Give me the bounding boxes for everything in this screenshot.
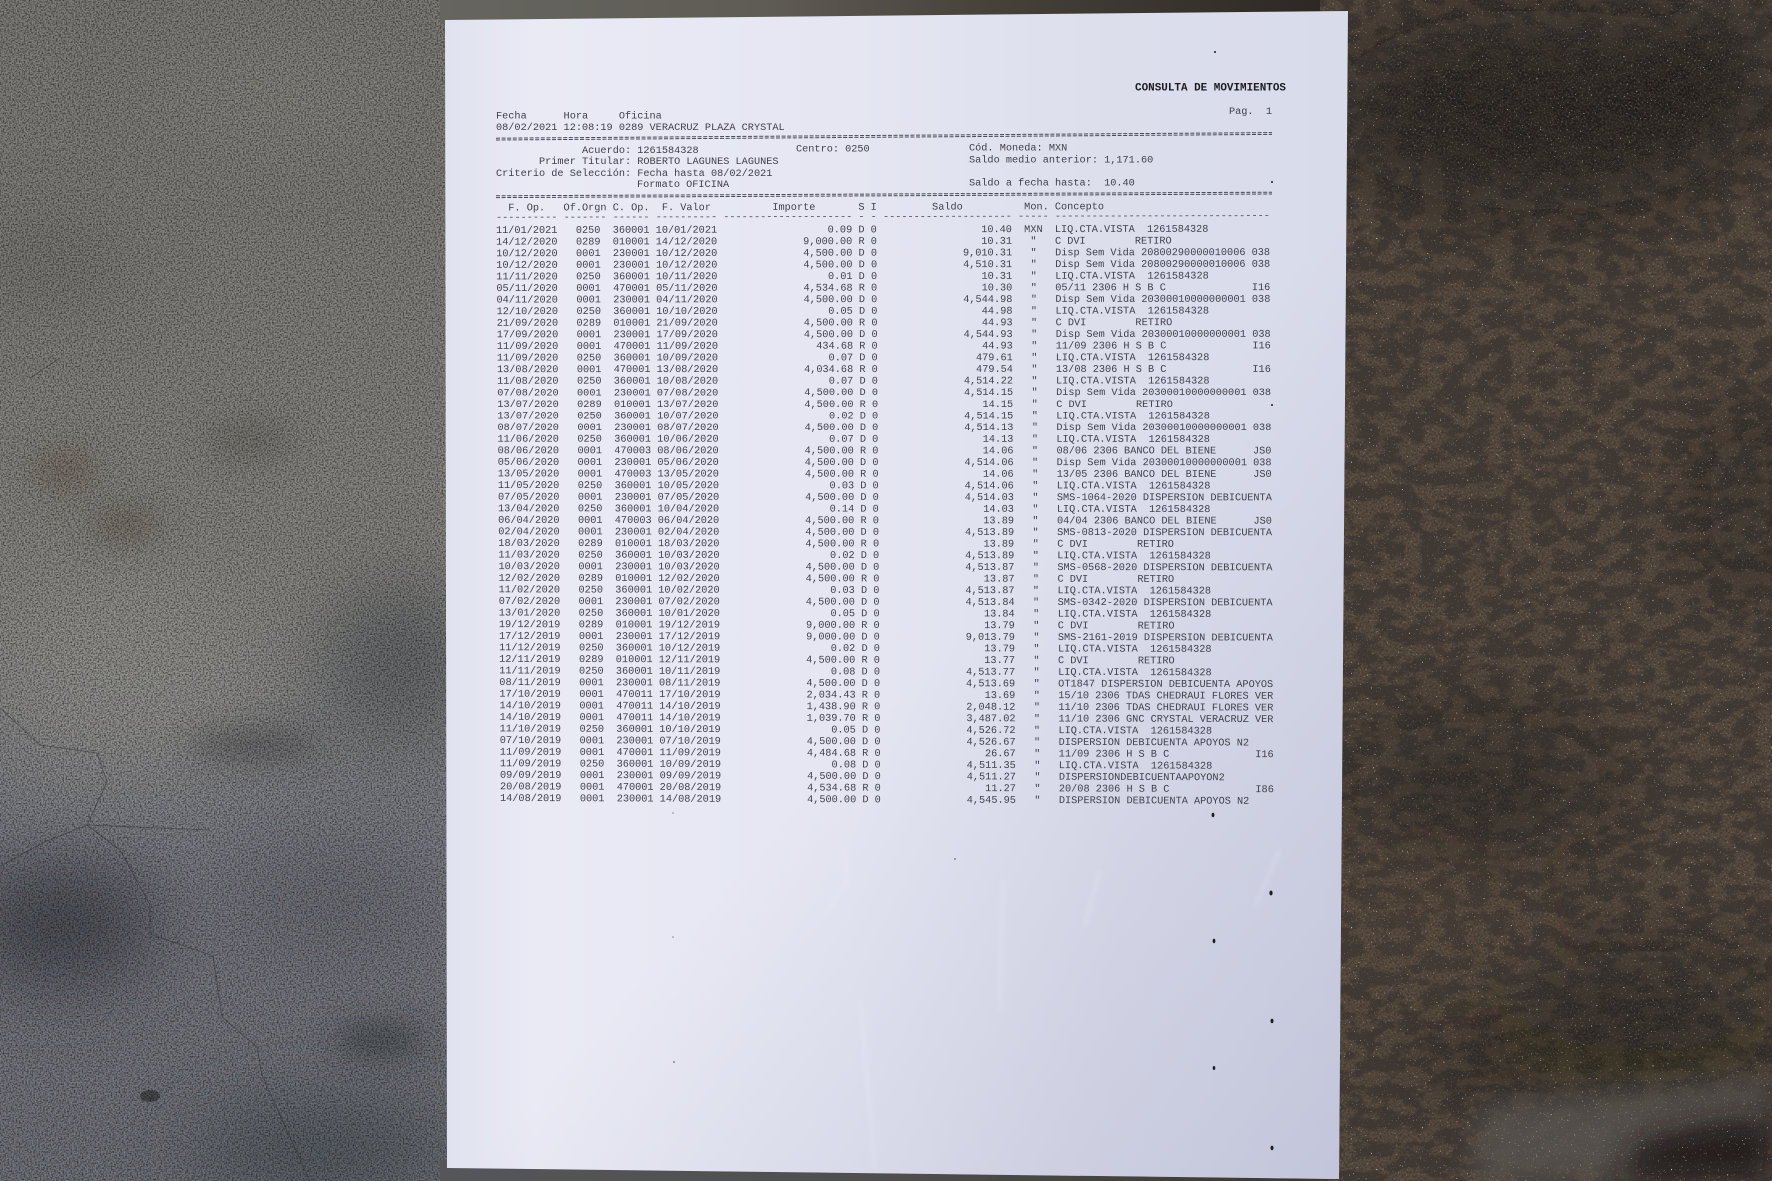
account details — [496, 142, 1153, 191]
column headers: ---------- ------- ------ ---------- --------------------- - - --------------------- ----- ----------------------------------- — [496, 210, 1270, 224]
transactions table: 14/08/2019 0001 230001 14/08/2019 4,500.00 D 0 4,545.95 " DISPERSION DEBICUENTA APOYOS N2 — [500, 793, 1249, 808]
transactions table: 07/08/2020 0001 230001 07/08/2020 4,500.00 D 0 4,514.15 " Disp Sem Vida 20300010000000001 038 — [497, 387, 1271, 399]
page number: Pag. 1 — [1229, 106, 1272, 118]
transactions table: 11/02/2020 0250 360001 10/02/2020 0.03 D 0 4,513.87 " LIQ.CTA.VISTA 1261584328 — [499, 584, 1211, 598]
upper rule — [496, 133, 1272, 140]
transactions table: 11/05/2020 0250 360001 10/05/2020 0.03 D 0 4,514.06 " LIQ.CTA.VISTA 1261584328 — [498, 480, 1210, 492]
account details: Primer Titular: ROBERTO LAGUNES LAGUNES — [539, 156, 779, 168]
transactions table: 12/02/2020 0289 010001 12/02/2020 4,500.00 R 0 13.87 " C DVI RETIRO — [499, 573, 1174, 586]
transactions table: 21/09/2020 0289 010001 21/09/2020 4,500.00 R 0 44.93 " C DVI RETIRO — [497, 317, 1172, 330]
transactions table: 19/12/2019 0289 010001 19/12/2019 9,000.00 R 0 13.79 " C DVI RETIRO — [499, 619, 1175, 633]
office line: Fecha Hora Oficina — [496, 110, 662, 122]
transactions table: 06/04/2020 0001 470003 06/04/2020 4,500.00 R 0 13.89 " 04/04 2306 BANCO DEL BIENE JS0 — [498, 515, 1272, 528]
report title: CONSULTA DE MOVIMIENTOS — [1135, 82, 1287, 94]
transactions table: 08/07/2020 0001 230001 08/07/2020 4,500.00 D 0 4,514.13 " Disp Sem Vida 20300010000000001 038 — [497, 422, 1271, 434]
cracks in the concrete — [0, 358, 310, 1181]
creases on the paper — [825, 850, 1280, 1170]
transactions table: 07/02/2020 0001 230001 07/02/2020 4,500.00 D 0 4,513.84 " SMS-0342-2020 DISPERSION DEBICUENTA — [499, 596, 1273, 609]
transactions table: 14/10/2019 0001 470011 14/10/2019 1,438.90 R 0 2,048.12 " 11/10 2306 TDAS CHEDRAUI FLORES VER — [499, 700, 1273, 714]
lower rule — [496, 192, 1272, 198]
account details: Acuerdo: 1261584328 — [582, 145, 699, 157]
transactions table: 13/07/2020 0250 360001 10/07/2020 0.02 D 0 4,514.15 " LIQ.CTA.VISTA 1261584328 — [497, 410, 1210, 422]
transactions table: 13/05/2020 0001 470003 13/05/2020 4,500.00 R 0 14.06 " 13/05 2306 BANCO DEL BIENE JS0 — [498, 468, 1272, 481]
transactions table: 10/12/2020 0001 230001 10/12/2020 4,500.00 D 0 9,010.31 " Disp Sem Vida 20800290000010006 038 — [496, 247, 1270, 260]
transactions table: 11/06/2020 0250 360001 10/06/2020 0.07 D 0 14.13 " LIQ.CTA.VISTA 1261584328 — [497, 434, 1210, 446]
toner specks on the paper — [672, 51, 1274, 1150]
column headers: F. Op. Of.Orgn C. Op. F. Valor Importe S I Saldo Mon. Concepto — [496, 201, 1104, 214]
transactions table: 08/11/2019 0001 230001 08/11/2019 4,500.00 D 0 4,513.69 " OT1847 DISPERSION DEBICUENTA APOYOS — [499, 677, 1273, 691]
transactions table: 09/09/2019 0001 230001 09/09/2019 4,500.00 D 0 4,511.27 " DISPERSIONDEBICUENTAAPOYON2 — [500, 770, 1225, 784]
transactions table: 10/12/2020 0001 230001 10/12/2020 4,500.00 D 0 4,510.31 " Disp Sem Vida 20800290000010006 038 — [496, 259, 1270, 272]
account details: Centro: 0250 — [796, 144, 870, 156]
transactions table: 11/10/2019 0250 360001 10/10/2019 0.05 D 0 4,526.72 " LIQ.CTA.VISTA 1261584328 — [500, 723, 1212, 738]
transactions table: 05/06/2020 0001 230001 05/06/2020 4,500.00 D 0 4,514.06 " Disp Sem Vida 20300010000000001 038 — [498, 457, 1272, 469]
transactions table: 13/01/2020 0250 360001 10/01/2020 0.05 D 0 13.84 " LIQ.CTA.VISTA 1261584328 — [499, 608, 1211, 621]
account details: Cód. Moneda: MXN — [969, 142, 1067, 154]
transactions table: 14/12/2020 0289 010001 14/12/2020 9,000.00 R 0 10.31 " C DVI RETIRO — [496, 236, 1172, 249]
transactions table: 04/11/2020 0001 230001 04/11/2020 4,500.00 D 0 4,544.98 " Disp Sem Vida 20300010000000001 038 — [496, 294, 1270, 306]
transactions table: 02/04/2020 0001 230001 02/04/2020 4,500.00 D 0 4,513.89 " SMS-0813-2020 DISPERSION DEBICUENTA — [498, 526, 1273, 539]
transactions table: 11/08/2020 0250 360001 10/08/2020 0.07 D 0 4,514.22 " LIQ.CTA.VISTA 1261584328 — [497, 375, 1210, 388]
transactions table: 13/04/2020 0250 360001 10/04/2020 0.14 D 0 14.03 " LIQ.CTA.VISTA 1261584328 — [498, 503, 1210, 516]
background: dark brown floor, right — [1320, 0, 1772, 1181]
transactions table: 14/10/2019 0001 470011 14/10/2019 1,039.70 R 0 3,487.02 " 11/10 2306 GNC CRYSTAL VERACRUZ VER — [500, 712, 1273, 726]
printed report — [496, 82, 1287, 808]
transactions table: 18/03/2020 0289 010001 18/03/2020 4,500.00 R 0 13.89 " C DVI RETIRO — [498, 538, 1174, 551]
transactions table: 13/07/2020 0289 010001 13/07/2020 4,500.00 R 0 14.15 " C DVI RETIRO — [497, 399, 1173, 411]
transactions table: 13/08/2020 0001 470001 13/08/2020 4,034.68 R 0 479.54 " 13/08 2306 H S B C I16 — [497, 364, 1271, 376]
transactions table: 20/08/2019 0001 470001 20/08/2019 4,534.68 R 0 11.27 " 20/08 2306 H S B C I86 — [500, 781, 1274, 796]
account details: Criterio de Selección: Fecha hasta 08/02/2021 — [496, 168, 772, 180]
transactions table: 11/09/2019 0250 360001 10/09/2019 0.08 D 0 4,511.35 " LIQ.CTA.VISTA 1261584328 — [500, 758, 1212, 773]
transactions table — [496, 224, 1274, 808]
transactions table: 11/03/2020 0250 360001 10/03/2020 0.02 D 0 4,513.89 " LIQ.CTA.VISTA 1261584328 — [498, 550, 1211, 562]
transactions table: 05/11/2020 0001 470001 05/11/2020 4,534.68 R 0 10.30 " 05/11 2306 H S B C I16 — [496, 282, 1270, 295]
transactions table: 11/11/2019 0250 360001 10/11/2019 0.08 D 0 4,513.77 " LIQ.CTA.VISTA 1261584328 — [499, 665, 1212, 679]
office line — [496, 110, 785, 134]
transactions table: 11/12/2019 0250 360001 10/12/2019 0.02 D 0 13.79 " LIQ.CTA.VISTA 1261584328 — [499, 642, 1212, 656]
account details: Formato OFICINA — [637, 179, 730, 191]
floor strips above and below the sheet — [440, 0, 1360, 1181]
transactions table: 07/10/2019 0001 230001 07/10/2019 4,500.00 D 0 4,526.67 " DISPERSION DEBICUENTA APOYOS N2 — [500, 735, 1249, 749]
transactions table: 10/03/2020 0001 230001 10/03/2020 4,500.00 D 0 4,513.87 " SMS-0568-2020 DISPERSION DEBICUENTA — [498, 561, 1273, 574]
transactions table: 11/09/2020 0001 470001 11/09/2020 434.68 R 0 44.93 " 11/09 2306 H S B C I16 — [497, 340, 1271, 353]
transactions table: 11/01/2021 0250 360001 10/01/2021 0.09 D 0 10.40 MXN LIQ.CTA.VISTA 1261584328 — [496, 224, 1208, 237]
transactions table: 11/09/2020 0250 360001 10/09/2020 0.07 D 0 479.61 " LIQ.CTA.VISTA 1261584328 — [497, 352, 1209, 364]
transactions table: 08/06/2020 0001 470003 08/06/2020 4,500.00 R 0 14.06 " 08/06 2306 BANCO DEL BIENE JS0 — [498, 445, 1271, 457]
account details: Saldo a fecha hasta: 10.40 — [969, 178, 1135, 190]
transactions table: 07/05/2020 0001 230001 07/05/2020 4,500.00 D 0 4,514.03 " SMS-1064-2020 DISPERSION DEBICUENTA — [498, 492, 1273, 504]
transactions table: 17/10/2019 0001 470011 17/10/2019 2,034.43 R 0 13.69 " 15/10 2306 TDAS CHEDRAUI FLORES VER — [499, 689, 1273, 703]
transactions table: 12/10/2020 0250 360001 10/10/2020 0.05 D 0 44.98 " LIQ.CTA.VISTA 1261584328 — [497, 305, 1209, 318]
office line: 08/02/2021 12:08:19 0289 VERACRUZ PLAZA CRYSTAL — [496, 122, 785, 134]
column headers — [496, 201, 1270, 224]
transactions table: 17/09/2020 0001 230001 17/09/2020 4,500.00 D 0 4,544.93 " Disp Sem Vida 20300010000000001 038 — [497, 329, 1271, 341]
transactions table: 17/12/2019 0001 230001 17/12/2019 9,000.00 D 0 9,013.79 " SMS-2161-2019 DISPERSION DEBICUENTA — [499, 631, 1274, 644]
background: grey concrete floor, left — [0, 0, 470, 1181]
transactions table: 11/09/2019 0001 470001 11/09/2019 4,484.68 R 0 26.67 " 11/09 2306 H S B C I16 — [500, 747, 1274, 761]
account details: Saldo medio anterior: 1,171.60 — [969, 154, 1153, 166]
transactions table: 11/11/2020 0250 360001 10/11/2020 0.01 D 0 10.31 " LIQ.CTA.VISTA 1261584328 — [496, 271, 1209, 283]
paper sheet — [445, 11, 1348, 1179]
transactions table: 12/11/2019 0289 010001 12/11/2019 4,500.00 R 0 13.77 " C DVI RETIRO — [499, 654, 1175, 667]
